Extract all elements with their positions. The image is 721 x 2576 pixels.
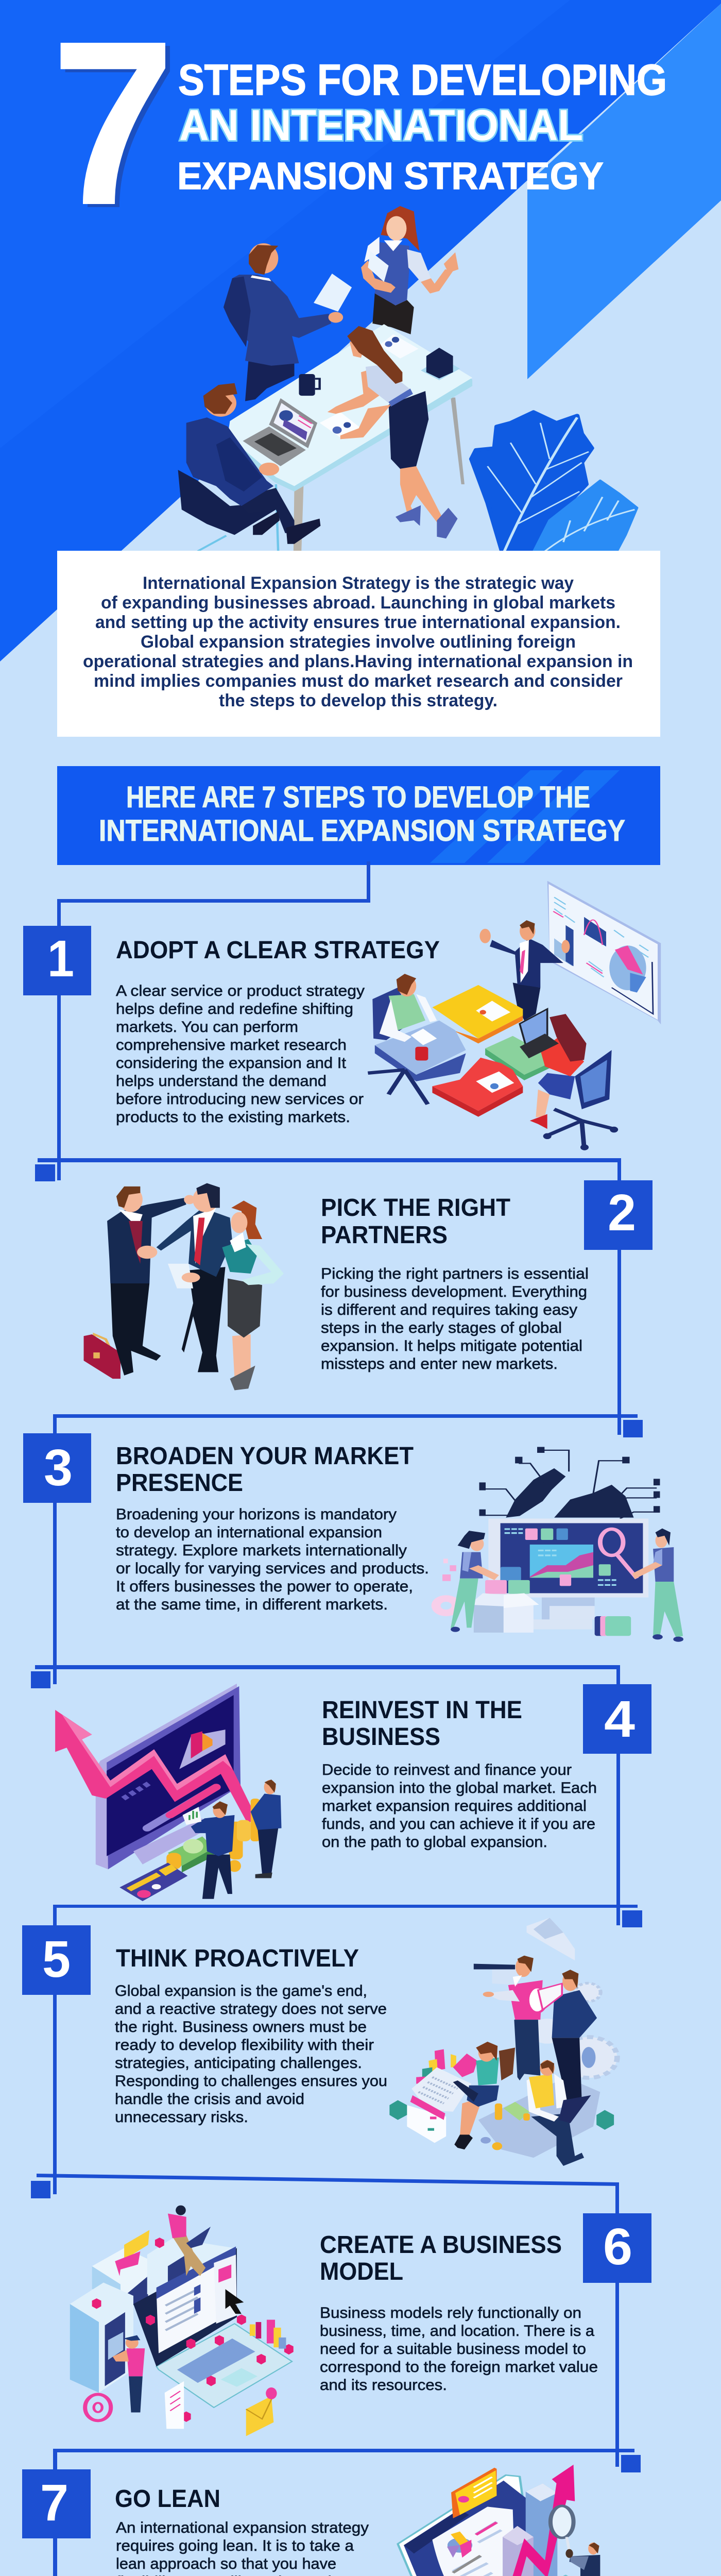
title [51, 0, 667, 257]
icon: chat bubbles [115, 2230, 149, 2276]
panel: step 6 [70, 2206, 651, 2436]
body 1: helps understand the demand [116, 1073, 327, 1090]
body 1: markets. You can perform [116, 1019, 298, 1036]
body 4: market expansion requires additional [322, 1798, 587, 1815]
intro panel: International Expansion Strategy is the strategic way [143, 573, 574, 593]
body 7 [115, 2519, 369, 2576]
icon: small pink cubes [92, 2238, 294, 2422]
body 2: for business development. Everything [321, 1283, 587, 1300]
badge 6 [583, 2213, 651, 2283]
illustration: puzzle meeting [368, 881, 661, 1150]
title lines: AN INTERNATIONAL [179, 101, 583, 149]
icon: man right [632, 1529, 683, 1642]
heading 2: PICK THE RIGHT [321, 1194, 510, 1222]
body 1 [116, 982, 365, 1126]
icon: globe with circuit nodes [479, 1447, 660, 1519]
body 4 [322, 1761, 597, 1851]
body 3: or locally for varying services and products. [116, 1560, 429, 1577]
title lines: EXPANSION STRATEGY [177, 155, 604, 197]
illustration: proactive team [389, 1918, 617, 2166]
heading 3: BROADEN YOUR MARKET [116, 1443, 414, 1470]
body 6: and its resources. [320, 2377, 447, 2394]
body 3: at the same time, in different markets. [116, 1596, 388, 1613]
icon: man back [251, 1780, 282, 1878]
heading 4: BUSINESS [322, 1723, 440, 1751]
body 6: Business models rely functionally on [320, 2304, 581, 2321]
body 5: strategies, anticipating challenges. [115, 2055, 362, 2072]
icon: servers [70, 2238, 234, 2393]
illustration: partners shaking hands [84, 1183, 284, 1390]
icon: man front [183, 1801, 234, 1899]
body 1: A clear service or product strategy [116, 982, 365, 999]
icon: laptop with browser window [133, 2246, 292, 2408]
body 6: need for a suitable business model to [320, 2341, 586, 2358]
icon: rising arrow [496, 2465, 575, 2576]
illustration: business team around a desk [178, 206, 637, 556]
icon: bars [250, 2320, 286, 2349]
body 5: Global expansion is the game's end, [115, 1982, 367, 1999]
body 1: products to the existing markets. [116, 1109, 350, 1126]
body 3: to develop an international expansion [116, 1524, 382, 1541]
big number seven: 7 [56, 0, 180, 257]
heading 6: MODEL [320, 2258, 403, 2285]
body 2: Picking the right partners is essential [321, 1265, 589, 1282]
body 1: considering the expansion and It [116, 1055, 347, 1072]
panel: step 7 [22, 2465, 641, 2576]
illustration: global market dashboard [432, 1447, 683, 1642]
icon: leaves [471, 412, 637, 556]
icon: money, coins and card [119, 1799, 260, 1901]
heading 7: GO LEAN [115, 2485, 220, 2513]
body 6: correspond to the foreign market value [320, 2359, 598, 2376]
badge 3: 3 [44, 1439, 73, 1497]
panel: step 3 [23, 1433, 683, 1642]
icon: presentation board [547, 881, 661, 1024]
panel: step 5 [22, 1918, 617, 2166]
banner heading: HERE ARE 7 STEPS TO DEVELOP THE [126, 781, 590, 814]
body 1: before introducing new services or [116, 1091, 364, 1108]
heading 6: CREATE A BUSINESS [320, 2231, 562, 2259]
icon: top person [168, 2206, 211, 2276]
body 5: unnecessary risks. [115, 2109, 248, 2126]
body 5 [115, 1982, 387, 2126]
icon: social circle, document and envelope [85, 2381, 277, 2436]
body 1: helps define and redefine shifting [116, 1001, 353, 1018]
icon: bottom person [113, 2335, 145, 2413]
icon: man left [107, 1187, 195, 1376]
badge 2: 2 [608, 1184, 636, 1242]
intro panel [57, 551, 660, 737]
illustration: investment growth monitor [55, 1684, 282, 1901]
intro panel: of expanding businesses abroad. Launching in global markets [101, 593, 615, 613]
body 4: on the path to global expansion. [322, 1834, 547, 1851]
banner heading [57, 766, 660, 865]
icon: seated man [178, 383, 320, 544]
banner heading: INTERNATIONAL EXPANSION STRATEGY [99, 814, 625, 848]
connector lines between steps [31, 861, 643, 2576]
icon: laptop screen [398, 2475, 534, 2576]
badge 1: 1 [47, 930, 74, 988]
body 2: missteps and enter new markets. [321, 1355, 558, 1372]
big number seven: 7 [51, 0, 175, 254]
badge 1 [23, 926, 91, 995]
icon: man in yellow vest [526, 2060, 591, 2166]
icon: bending woman [328, 326, 458, 538]
title lines [177, 56, 667, 197]
icon: briefcase [84, 1334, 121, 1379]
icon: puzzle pieces [375, 985, 557, 1117]
body 2 [321, 1265, 589, 1372]
badge 4: 4 [604, 1690, 635, 1748]
icon: seated man [368, 974, 437, 1104]
badge 4 [583, 1684, 651, 1754]
body 5: ready to develop flexibility with their [115, 2037, 374, 2054]
icon: speech bubble [451, 2468, 496, 2518]
badge 2 [584, 1180, 653, 1250]
panel: step 2 [84, 1180, 653, 1390]
heading 1: ADOPT A CLEAR STRATEGY [116, 937, 440, 964]
header background shapes [0, 0, 721, 662]
heading 4: REINVEST IN THE [322, 1697, 522, 1724]
icon: zigzag arrow [55, 1710, 255, 1825]
icon: laptop base [439, 2575, 641, 2576]
intro panel: the steps to develop this strategy. [219, 691, 497, 710]
icon: man with megaphone [528, 1970, 597, 2100]
illustration: lean analytics laptop [398, 2465, 641, 2576]
body 5: the right. Business owners must be [115, 2019, 367, 2036]
body 1: comprehensive market research [116, 1037, 347, 1054]
badge 7: 7 [40, 2474, 68, 2532]
icon: standing woman with red hair [361, 206, 458, 334]
body 5: and a reactive strategy does not serve [115, 2001, 387, 2018]
icon: seated woman [520, 1009, 618, 1150]
badge 6: 6 [603, 2218, 632, 2276]
icon: monitor dashboard [485, 1519, 648, 1630]
body 3: Broadening your horizons is mandatory [116, 1506, 397, 1523]
badge 5: 5 [42, 1930, 71, 1988]
icon: desk [198, 324, 472, 556]
panel: step 4 [55, 1684, 651, 1901]
heading 3: PRESENCE [116, 1469, 243, 1497]
body 6: business, time, and location. There is a [320, 2323, 594, 2340]
body 3: It offers businesses the power to operate, [116, 1578, 413, 1595]
body 4: expansion into the global market. Each [322, 1780, 597, 1797]
intro panel: mind implies companies must do market research and consider [94, 671, 623, 691]
icon: man middle [157, 1183, 232, 1372]
heading 5: THINK PROACTIVELY [116, 1945, 359, 1972]
body 7: An international expansion strategy [116, 2519, 369, 2536]
heading 2 [321, 1194, 510, 1249]
body 7: requires going lean. It is to take a [116, 2537, 354, 2554]
illustration: digital business model [70, 2206, 294, 2436]
icon: man standing [565, 2543, 600, 2576]
body 2: is different and requires taking easy [321, 1301, 577, 1318]
heading 2: PARTNERS [321, 1222, 448, 1249]
body 2: expansion. It helps mitigate potential [321, 1337, 582, 1354]
heading 4 [322, 1697, 522, 1751]
icon: woman [222, 1200, 284, 1390]
heading 3 [116, 1443, 414, 1497]
body 5: handle the crisis and avoid [115, 2091, 304, 2108]
icon: calendar and newspaper [407, 2067, 471, 2143]
icon: briefcase and charts [416, 2047, 515, 2084]
badge 7 [22, 2469, 91, 2538]
intro panel: Global expansion strategies involve outlining foreign [141, 632, 576, 652]
icon: man with telescope [474, 1956, 543, 2080]
icon: seated woman [453, 2042, 499, 2149]
heading 6 [320, 2231, 562, 2285]
icon: platform [478, 2077, 600, 2158]
body 6 [320, 2304, 598, 2394]
body 2: steps in the early stages of global [321, 1319, 562, 1336]
intro panel: and setting up the activity ensures true international expansion. [95, 613, 621, 632]
body 7: lean approach so that you have [116, 2555, 336, 2572]
body 4: funds, and you can achieve it if you are [322, 1816, 595, 1833]
icon: gears and cloud [526, 1918, 617, 2078]
icon: 3D bars [476, 2483, 557, 2576]
body 4: Decide to reinvest and finance your [322, 1761, 572, 1778]
title lines: STEPS FOR DEVELOPING [178, 56, 667, 104]
icon: laptop [243, 398, 317, 466]
body 3 [116, 1506, 429, 1613]
intro panel: operational strategies and plans.Having international expansion in [83, 652, 633, 671]
badge 3 [23, 1433, 91, 1503]
icon: presenter [479, 920, 570, 1021]
icon: money stack [495, 2102, 530, 2121]
body 3: strategy. Explore markets internationally [116, 1542, 407, 1559]
icon: boxes, gear, cards [432, 1558, 631, 1636]
badge 5 [22, 1925, 91, 1995]
icon: woman left [451, 1531, 499, 1632]
panel: step 1 [23, 881, 661, 1150]
body 5: Responding to challenges ensures you [115, 2073, 387, 2090]
icon: cubes [389, 2100, 614, 2150]
icon: standing man with paper [224, 243, 352, 401]
icon: magnifying glass [551, 2506, 574, 2551]
icon: monitor [96, 1684, 241, 1869]
